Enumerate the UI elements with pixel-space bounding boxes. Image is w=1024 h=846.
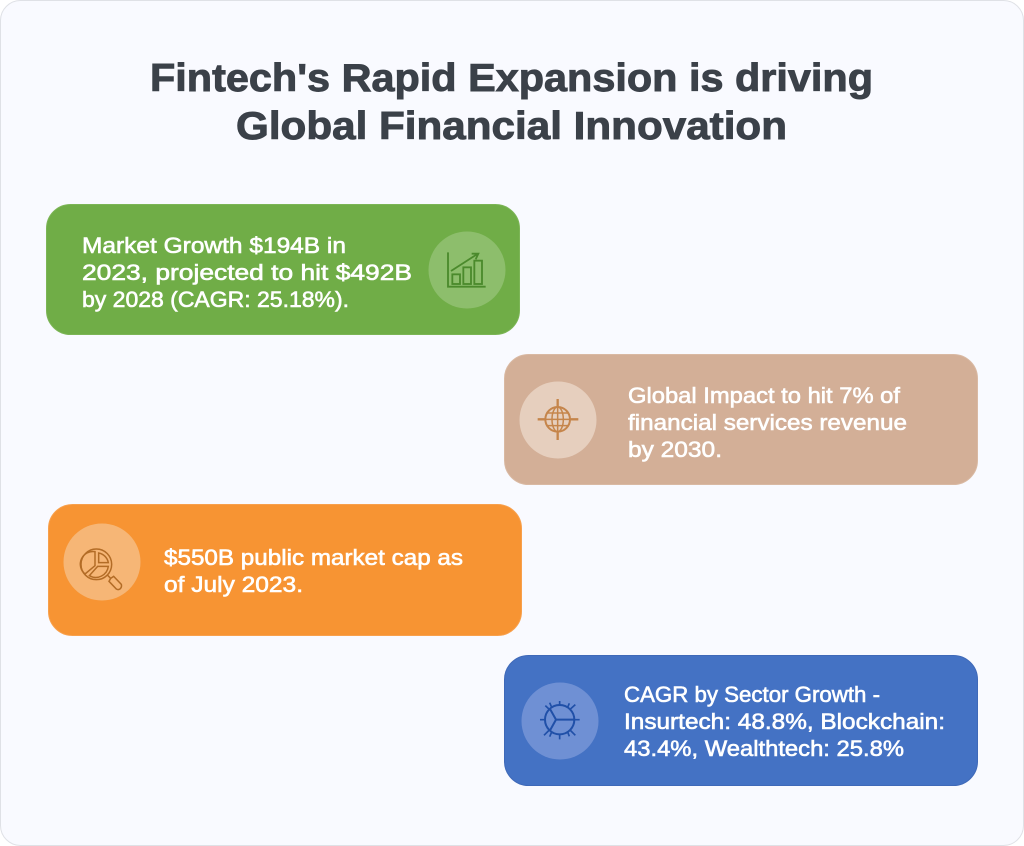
panel: public market cap [48,504,522,636]
text: CAGR by sector: Insurtech: 48.8%, Blockchain: [624,709,945,734]
icon: segmented gear [522,682,598,760]
panel: market growth [46,204,520,334]
text: market growth: Market Growth $194B in [82,233,346,258]
icon: magnifier with pie chart [64,524,140,600]
title: Fintech's Rapid Expansion is driving [150,57,873,100]
text: public market cap: of July 2023. [164,572,303,597]
title: Global Financial Innovation [236,105,787,148]
icon: rising bar chart [428,232,506,308]
text: CAGR by sector [624,682,945,761]
icon: globe with crosshair [520,382,596,458]
text: global impact: by 2030. [628,437,722,462]
text: global impact: financial services revenue [628,410,907,435]
panel: global impact [504,354,978,484]
text: CAGR by sector: CAGR by Sector Growth - [624,682,880,707]
text: market growth: by 2028 (CAGR: 25.18%). [82,287,349,312]
text: global impact [628,383,907,462]
text: market growth [82,233,412,312]
text: CAGR by sector: 43.4%, Wealthtech: 25.8% [624,736,904,761]
text: global impact: Global Impact to hit 7% of [628,383,901,408]
text: market growth: 2023, projected to hit $492B [82,260,412,285]
text: public market cap: $550B public market cap as [164,545,463,570]
panel: CAGR by sector [504,656,978,786]
title [150,57,873,148]
text: public market cap [164,545,463,597]
